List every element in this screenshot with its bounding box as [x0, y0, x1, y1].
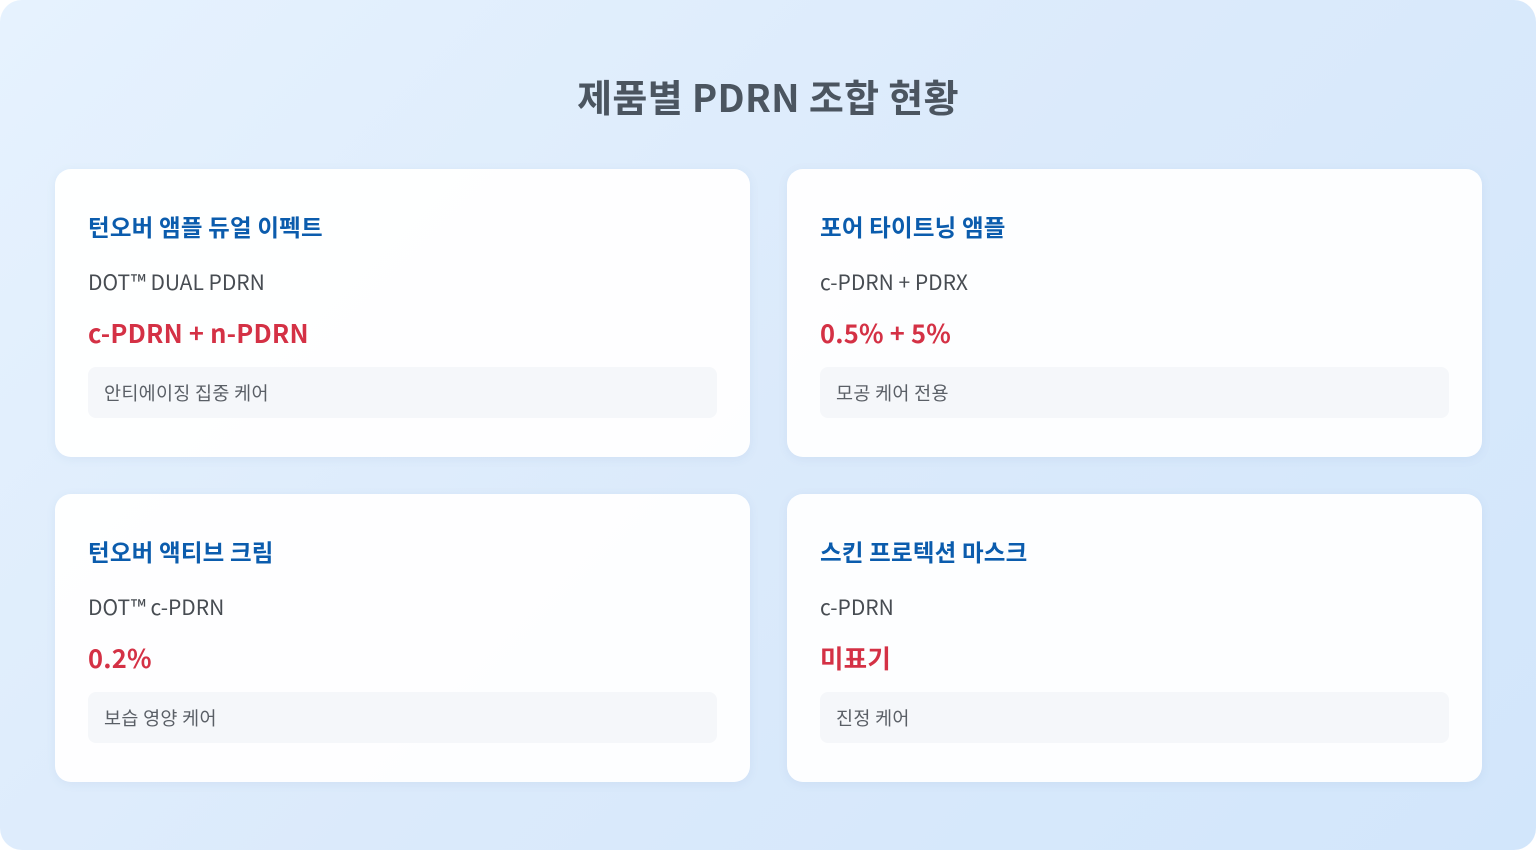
panel: 턴오버 앰플 듀얼 이펙트 — [55, 169, 750, 457]
note — [820, 367, 1449, 418]
subtitle: c-PDRN + PDRX — [820, 267, 968, 297]
note: 안티에이징 집중 케어 — [104, 380, 269, 406]
note: 보습 영양 케어 — [104, 705, 217, 731]
value: 0.5% + 5% — [820, 314, 951, 351]
heading: 턴오버 앰플 듀얼 이펙트 — [88, 209, 323, 243]
value: 0.2% — [88, 639, 152, 676]
subtitle: DOT™ c-PDRN — [88, 592, 224, 622]
note — [88, 367, 717, 418]
title: 제품별 PDRN 조합 현황 — [577, 68, 959, 123]
value: c-PDRN + n-PDRN — [88, 314, 309, 351]
note: 진정 케어 — [836, 705, 910, 731]
heading: 포어 타이트닝 앰플 — [820, 209, 1006, 243]
heading: 턴오버 액티브 크림 — [88, 534, 274, 568]
panel: 스킨 프로텍션 마스크 — [787, 494, 1482, 782]
note: 모공 케어 전용 — [836, 380, 949, 406]
panel: 턴오버 액티브 크림 — [55, 494, 750, 782]
heading: 스킨 프로텍션 마스크 — [820, 534, 1027, 568]
note — [820, 692, 1449, 743]
subtitle: DOT™ DUAL PDRN — [88, 267, 265, 297]
subtitle: c-PDRN — [820, 592, 894, 622]
value: 미표기 — [820, 639, 891, 676]
note — [88, 692, 717, 743]
panel: 포어 타이트닝 앰플 — [787, 169, 1482, 457]
